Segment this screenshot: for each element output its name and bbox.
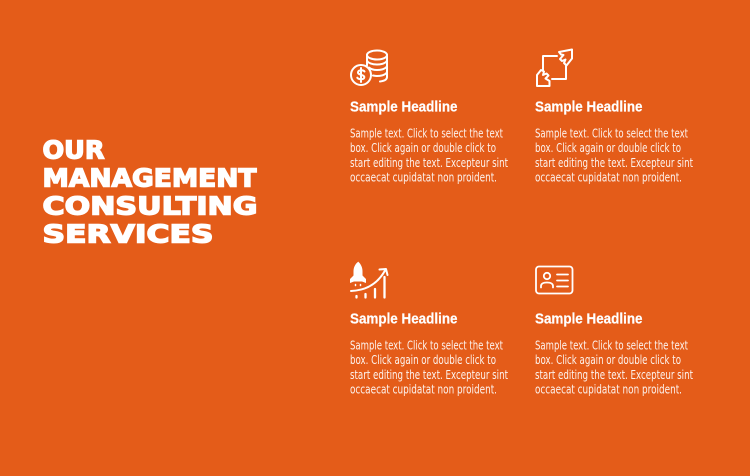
text block — [350, 338, 508, 396]
text block: box. Click again or double click to — [535, 353, 681, 367]
title: SERVICES — [42, 220, 213, 248]
title: MANAGEMENT — [42, 164, 257, 192]
heading: Sample Headline — [350, 310, 458, 328]
panel: handshake service — [535, 50, 693, 184]
heading: Sample Headline — [350, 98, 458, 116]
panel: finance service — [350, 50, 508, 184]
text block: occaecat cupidatat non proident. — [350, 382, 497, 396]
text block: Sample text. Click to select the text — [350, 338, 503, 352]
text block: start editing the text. Excepteur sint — [350, 368, 508, 382]
text block: Sample text. Click to select the text — [535, 126, 688, 140]
icon: ID card — [536, 266, 572, 294]
heading: Sample Headline — [535, 310, 642, 328]
text block: start editing the text. Excepteur sint — [535, 156, 693, 170]
text block: occaecat cupidatat non proident. — [535, 382, 682, 396]
text block — [535, 126, 693, 184]
icon: rocket and growth chart — [350, 262, 388, 298]
text block — [350, 126, 508, 184]
text block: occaecat cupidatat non proident. — [350, 170, 497, 184]
text block: start editing the text. Excepteur sint — [535, 368, 693, 382]
text block: Sample text. Click to select the text — [535, 338, 688, 352]
text block: Sample text. Click to select the text — [350, 126, 503, 140]
text block: box. Click again or double click to — [535, 141, 681, 155]
panel: profile service — [535, 266, 693, 396]
icon: hands holding a square — [537, 50, 572, 86]
icon: coins — [351, 50, 387, 85]
title — [42, 136, 258, 248]
panel: growth service — [350, 262, 508, 396]
text block: occaecat cupidatat non proident. — [535, 170, 682, 184]
text block — [535, 338, 693, 396]
heading: Sample Headline — [535, 98, 642, 116]
text block: box. Click again or double click to — [350, 353, 496, 367]
title: OUR — [42, 136, 105, 164]
title: CONSULTING — [42, 192, 258, 220]
text block: start editing the text. Excepteur sint — [350, 156, 508, 170]
text block: box. Click again or double click to — [350, 141, 496, 155]
